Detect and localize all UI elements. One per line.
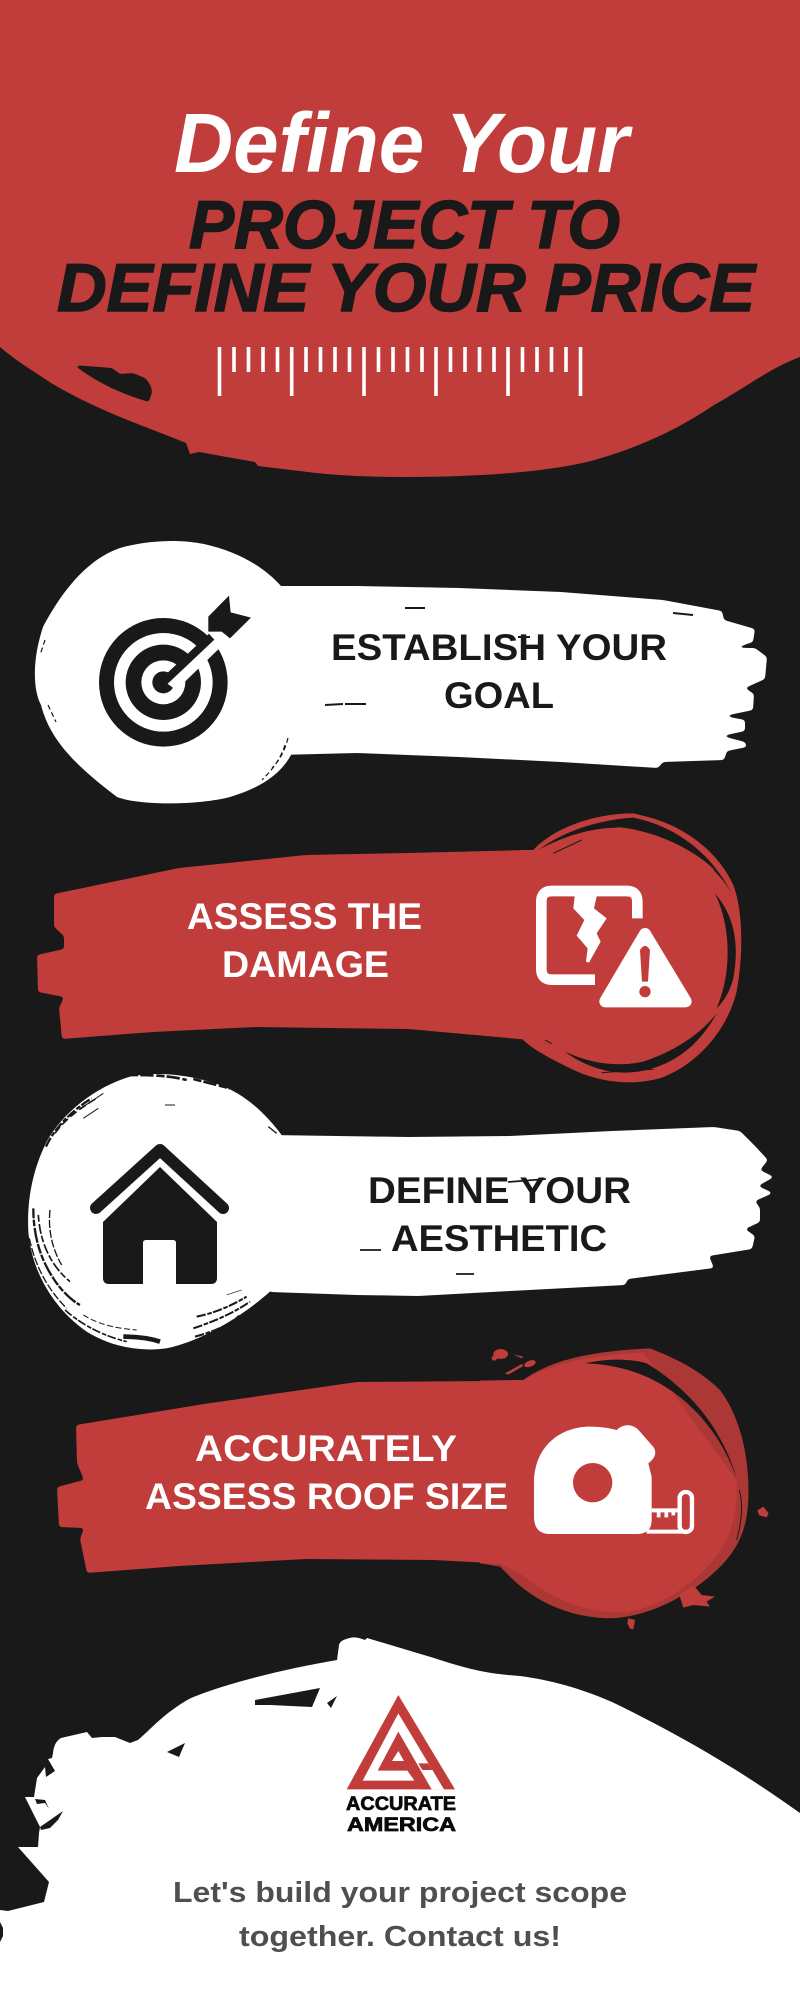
panel: assess the damage <box>37 813 741 1082</box>
logo: Accurate America: ACCURATE <box>346 1794 456 1815</box>
logo: Accurate America <box>346 1695 456 1836</box>
title: PROJECT TO <box>189 187 620 263</box>
call to action text: together. Contact us! <box>239 1921 561 1953</box>
icon: cracked tile with warning <box>541 891 686 1001</box>
icon: target with arrow <box>99 596 251 747</box>
panel: define your aesthetic <box>28 1074 774 1349</box>
call to action text: Let's build your project scope <box>173 1877 627 1909</box>
label: accurately assess roof size: ASSESS ROOF SIZE <box>145 1476 508 1517</box>
icon: tape measure <box>534 1425 692 1534</box>
paint splatters <box>492 1349 769 1629</box>
icon: house <box>96 1150 223 1284</box>
label: establish your goal <box>331 627 667 716</box>
label: assess the damage <box>187 896 422 985</box>
label: accurately assess roof size: ACCURATELY <box>195 1428 457 1469</box>
header panel: red brush background <box>0 0 800 477</box>
label: establish your goal: ESTABLISH YOUR <box>331 627 667 668</box>
label: define your aesthetic: AESTHETIC <box>391 1218 607 1259</box>
call to action text <box>173 1877 627 1953</box>
logo: Accurate America: AMERICA <box>347 1815 456 1836</box>
title: Define Your <box>174 96 633 190</box>
icon: ruler ticks <box>220 347 580 396</box>
label: assess the damage: ASSESS THE <box>187 896 422 937</box>
label: define your aesthetic <box>368 1170 631 1259</box>
title: DEFINE YOUR PRICE <box>57 250 758 326</box>
label: establish your goal: GOAL <box>444 675 554 716</box>
footer panel: white brush background <box>0 1637 800 2000</box>
panel: accurately assess roof size <box>57 1348 769 1629</box>
label: accurately assess roof size <box>145 1428 508 1517</box>
panel: establish your goal <box>35 541 767 803</box>
title <box>57 96 758 326</box>
label: define your aesthetic: DEFINE YOUR <box>368 1170 631 1211</box>
label: assess the damage: DAMAGE <box>222 944 389 985</box>
